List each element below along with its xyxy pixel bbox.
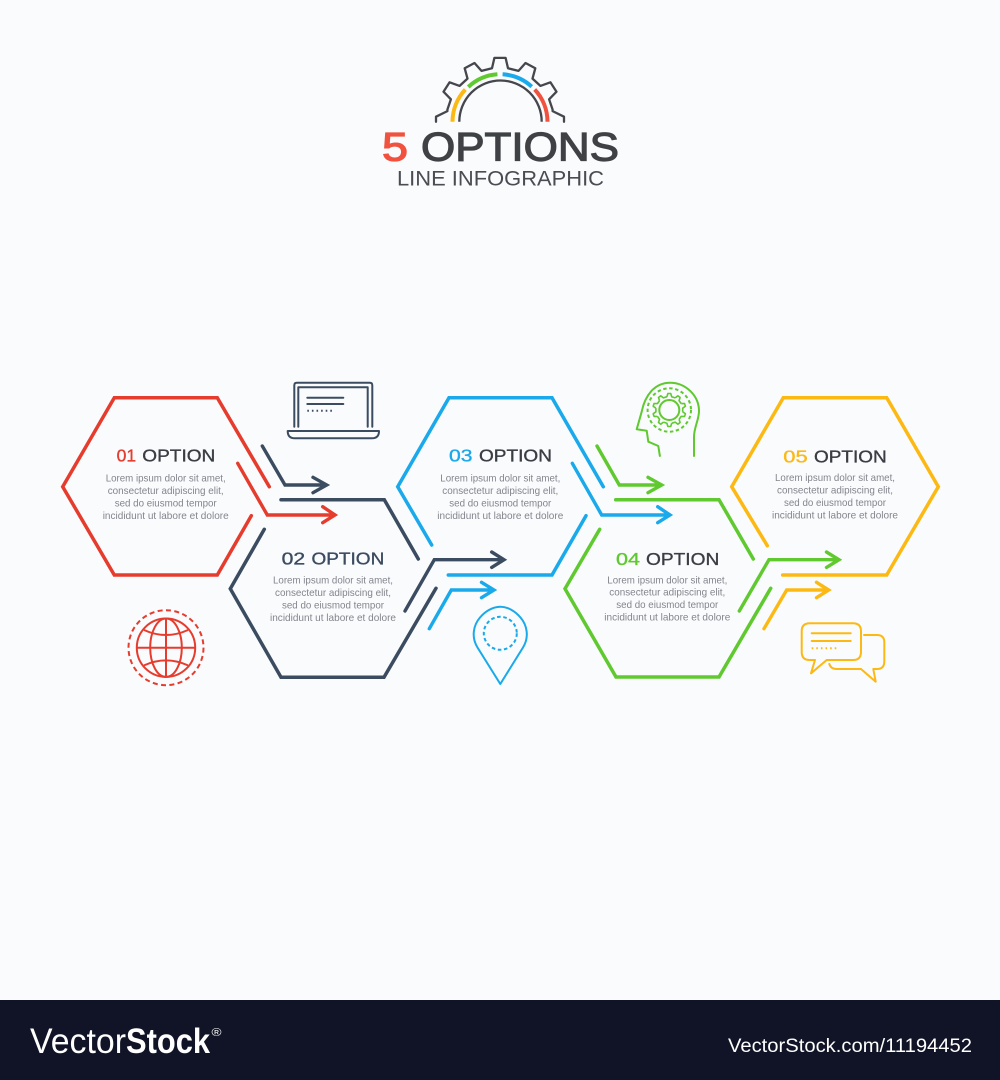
text block: option 02: incididunt ut labore et dolore bbox=[270, 612, 396, 624]
logo: VectorStock: Stock bbox=[126, 1022, 210, 1061]
text block: option 05 bbox=[772, 472, 898, 521]
text block: option 05: consectetur adipiscing elit, bbox=[777, 484, 893, 496]
text block: option 02: Lorem ipsum dolor sit amet, bbox=[273, 575, 393, 587]
heading: 02 OPTION: OPTION bbox=[312, 548, 384, 568]
arrow: green upper bbox=[597, 446, 662, 493]
hexagon outline: option 01 bbox=[63, 398, 269, 575]
header bbox=[382, 58, 619, 191]
heading: 01 OPTION: OPTION bbox=[142, 446, 215, 466]
arrow: green lower bbox=[739, 552, 839, 611]
text block: option 01: consectetur adipiscing elit, bbox=[108, 485, 224, 497]
icon: map pin bbox=[474, 607, 527, 684]
heading: 02 OPTION: 02 bbox=[282, 548, 305, 568]
arrow: blue lower bbox=[429, 582, 494, 629]
heading: 04 OPTION: OPTION bbox=[646, 549, 719, 569]
icon: gear with coloured arcs bbox=[436, 58, 564, 122]
heading: 03 OPTION: 03 bbox=[449, 446, 472, 466]
text block: option 03: Lorem ipsum dolor sit amet, bbox=[440, 473, 560, 485]
arrow: red bbox=[238, 463, 335, 523]
heading: 05 OPTION: 05 bbox=[783, 446, 808, 466]
arrow: dark upper bbox=[262, 446, 327, 493]
icon: globe bbox=[128, 610, 204, 685]
text block: option 04: consectetur adipiscing elit, bbox=[609, 587, 725, 599]
panel: option 03 bbox=[398, 398, 670, 684]
text block: option 05: sed do eiusmod tempor bbox=[784, 497, 886, 509]
text block: option 02 bbox=[270, 575, 396, 624]
text block: option 03: consectetur adipiscing elit, bbox=[442, 485, 558, 497]
text block: option 04: sed do eiusmod tempor bbox=[616, 599, 719, 611]
text block: option 05: Lorem ipsum dolor sit amet, bbox=[775, 472, 895, 484]
panel: option 05 bbox=[732, 398, 938, 682]
heading: 04 OPTION: 04 bbox=[616, 549, 640, 569]
title: 5 OPTIONS: OPTIONS bbox=[421, 126, 619, 170]
text block: option 04: Lorem ipsum dolor sit amet, bbox=[607, 574, 727, 586]
logo: VectorStock: Vector bbox=[30, 1022, 126, 1061]
icon: chat bubbles bbox=[802, 623, 884, 682]
text block: option 02: sed do eiusmod tempor bbox=[282, 600, 384, 612]
hexagon outline: option 04 bbox=[565, 500, 771, 677]
heading: 01 OPTION: 01 bbox=[117, 446, 136, 466]
text block: option 04: incididunt ut labore et dolore bbox=[604, 612, 730, 624]
arrow: blue upper bbox=[572, 463, 670, 523]
footer bar bbox=[0, 1000, 1000, 1080]
text block: option 01: incididunt ut labore et dolore bbox=[103, 510, 229, 522]
text block: option 02: consectetur adipiscing elit, bbox=[275, 587, 391, 599]
panel: option 04 bbox=[565, 383, 839, 677]
hexagon outline: option 05 bbox=[732, 398, 938, 575]
panel: option 01 bbox=[63, 398, 335, 685]
heading: 03 OPTION: OPTION bbox=[479, 446, 552, 466]
hexagon outline: option 03 bbox=[398, 398, 603, 575]
text block: option 01: Lorem ipsum dolor sit amet, bbox=[106, 473, 226, 485]
hexagon outline: option 02 bbox=[230, 500, 436, 677]
text block: option 01 bbox=[103, 473, 229, 522]
text block: option 04 bbox=[604, 574, 730, 624]
icon: laptop bbox=[288, 383, 379, 438]
text block: option 03 bbox=[437, 473, 563, 522]
arrow: dark lower bbox=[405, 552, 504, 611]
text block: option 03: incididunt ut labore et dolore bbox=[437, 510, 563, 522]
text block: option 01: sed do eiusmod tempor bbox=[115, 498, 217, 510]
subtitle: LINE INFOGRAPHIC bbox=[397, 168, 604, 191]
arrow: yellow bbox=[764, 582, 829, 629]
footer image id: VectorStock.com/11194452 bbox=[728, 1036, 972, 1057]
text block: option 05: incididunt ut labore et dolore bbox=[772, 509, 898, 521]
title: 5 OPTIONS: 5 bbox=[382, 126, 408, 170]
panel: option 02 bbox=[230, 383, 504, 677]
text block: option 03: sed do eiusmod tempor bbox=[449, 498, 552, 510]
icon: head with gear bbox=[637, 383, 699, 457]
logo: VectorStock: ® bbox=[212, 1027, 222, 1039]
heading: 05 OPTION: OPTION bbox=[814, 446, 887, 466]
